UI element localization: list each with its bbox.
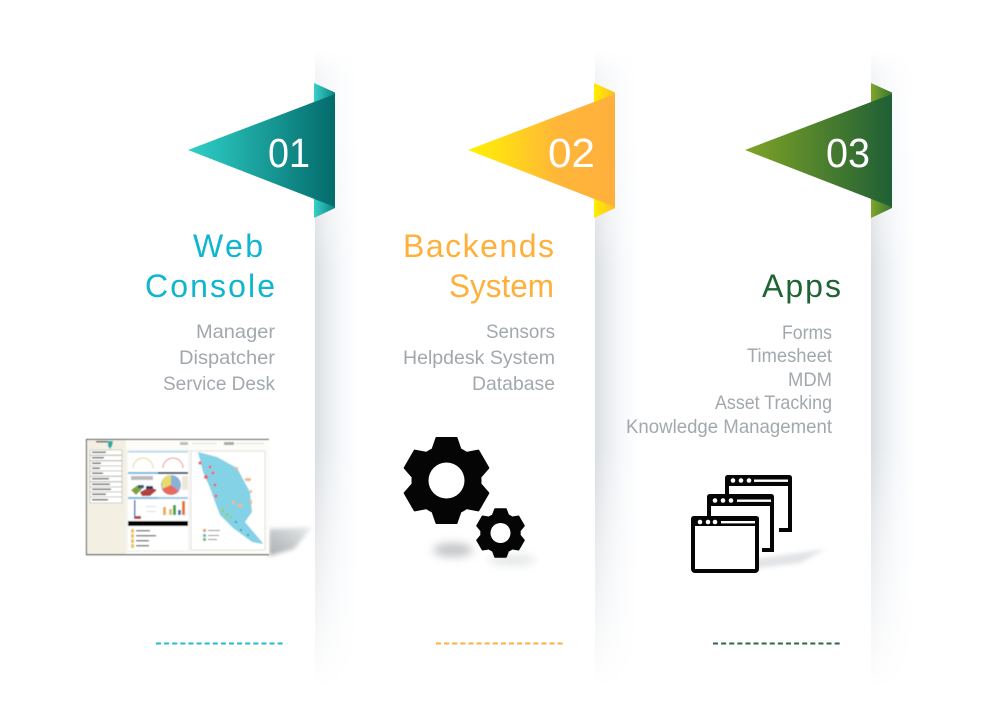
dashed rule [713,642,840,644]
panel: backends system [402,83,615,644]
dashed rule [156,642,283,644]
heading: web console [145,228,275,304]
list: apps: Forms [782,322,832,344]
list: backend components: Database [472,373,555,395]
heading: backends system [403,228,554,304]
list: web console roles: Service Desk [163,373,275,395]
screenshot shadow [269,527,312,556]
list: backend components: Helpdesk System [403,347,555,369]
column shadows [315,68,900,633]
ribbon: 01: 01 [268,130,310,176]
list: backend components: Sensors [486,321,555,343]
icon: stacked windows [691,475,792,571]
heading: web console: Web [193,228,263,264]
heading: web console: Console [145,268,275,304]
list: apps: MDM [788,369,832,391]
list: apps: Knowledge Management [626,416,833,438]
infographic [85,68,900,644]
screenshot: dashboard [86,439,269,555]
heading: apps: Apps [762,268,841,304]
windows shadow [708,549,826,570]
panel: apps [626,83,892,644]
icon: small gear [475,509,526,557]
ribbon: 01 [188,83,335,218]
heading: backends system: System [449,268,554,304]
list: apps: Asset Tracking [715,392,832,414]
list: apps [626,322,833,438]
panel: web console [86,83,335,644]
ribbon: 03: 03 [826,130,870,176]
heading: backends system: Backends [403,228,554,264]
list: web console roles: Dispatcher [179,347,276,369]
list: apps: Timesheet [747,345,833,367]
ribbon: 02: 02 [548,130,595,176]
list: web console roles [163,321,276,395]
gear shadows [433,543,536,565]
list: backend components [403,321,555,395]
ribbon: 02 [468,83,615,218]
ribbon: 03 [745,83,892,218]
icon: large gear [402,438,491,523]
list: web console roles: Manager [196,321,276,343]
dashed rule [436,642,563,644]
